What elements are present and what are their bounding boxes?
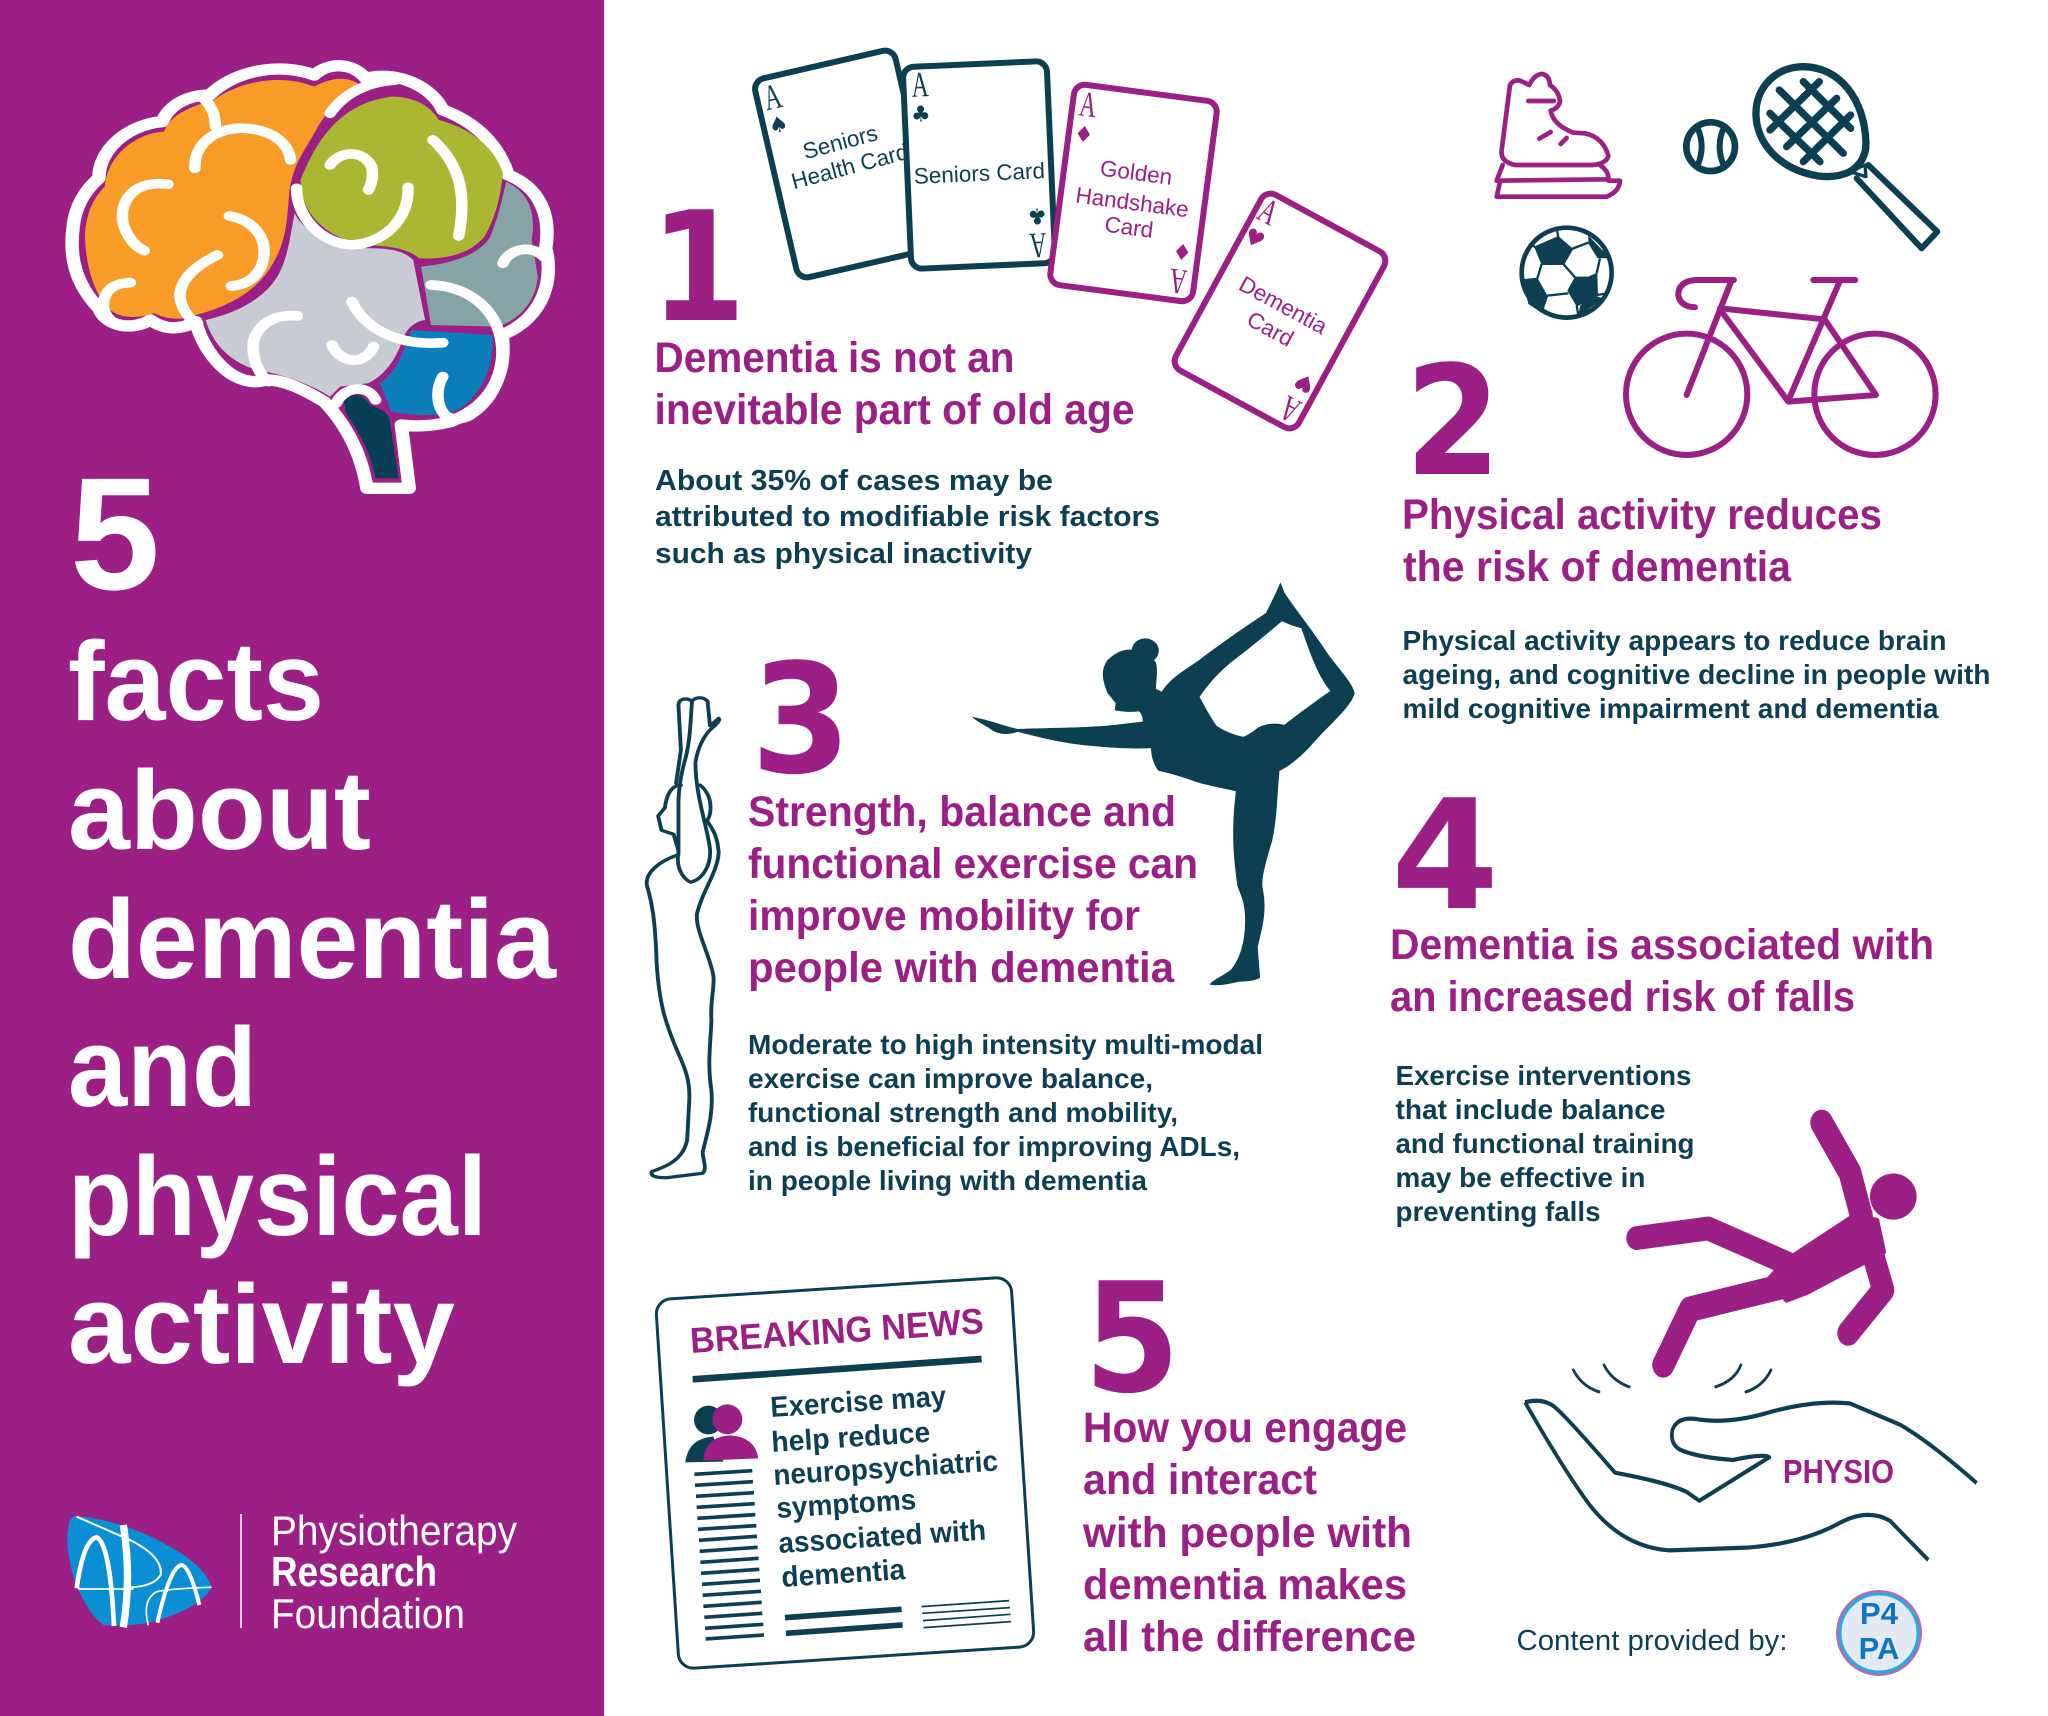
card: Seniors Health Card: Seniors bbox=[800, 120, 880, 164]
title: 5 facts about dementia and physical activity: dementia bbox=[68, 877, 557, 1002]
body text 2: mild cognitive impairment and dementia bbox=[1402, 693, 1939, 724]
body text 4: that include balance bbox=[1396, 1094, 1666, 1125]
card: Seniors Card: A bbox=[911, 64, 929, 105]
title: 5 facts about dementia and physical activity: 5 bbox=[70, 444, 160, 623]
illustration: falling figure and hand bbox=[1525, 1123, 1977, 1560]
heading 4: an increased risk of falls bbox=[1390, 973, 1855, 1021]
logo text: Physiotherapy Research Foundation: Foundation bbox=[271, 1590, 465, 1637]
body text 3: exercise can improve balance, bbox=[748, 1063, 1153, 1094]
number 1: 1 bbox=[650, 179, 746, 356]
body text 4: Exercise interventions bbox=[1396, 1060, 1692, 1091]
icon: P4PA badge: P4 bbox=[1860, 1596, 1899, 1631]
heading 4 bbox=[1390, 921, 1934, 1021]
title: 5 facts about dementia and physical activity: facts bbox=[68, 619, 324, 744]
logo divider bbox=[240, 1514, 242, 1628]
number 2: 2 bbox=[1405, 333, 1501, 510]
heading 1 bbox=[654, 334, 1134, 434]
icon: ice skate bbox=[1497, 74, 1620, 197]
number 4: 4 bbox=[1391, 767, 1499, 944]
news text bbox=[769, 1381, 999, 1594]
content credit: Content provided by: bbox=[1516, 1625, 1788, 1657]
heading 2: Physical activity reduces bbox=[1402, 491, 1882, 539]
heading 3: people with dementia bbox=[748, 944, 1175, 992]
card: Golden Handshake Card: Card bbox=[1103, 212, 1155, 243]
news text: Exercise may bbox=[769, 1381, 947, 1424]
illustration: sports icons bbox=[1497, 67, 1937, 455]
section 5: engagement bbox=[1082, 1250, 1416, 1661]
icon: bicycle bbox=[1626, 280, 1936, 455]
card: Golden Handshake Card bbox=[1049, 82, 1218, 304]
heading 2 bbox=[1402, 491, 1882, 591]
heading 1: Dementia is not an bbox=[654, 334, 1014, 382]
card: Golden Handshake Card: Golden bbox=[1099, 156, 1174, 190]
card: Seniors Health Card: A bbox=[760, 75, 785, 118]
icon: P4PA badge: PA bbox=[1859, 1631, 1899, 1666]
card: Seniors Health Card bbox=[753, 48, 939, 280]
heading 4: Dementia is associated with bbox=[1390, 921, 1934, 969]
title: 5 facts about dementia and physical activity bbox=[68, 444, 557, 1387]
card: Golden Handshake Card: ♦ bbox=[1072, 122, 1095, 149]
heading 3: functional exercise can bbox=[748, 840, 1198, 888]
body text 3: Moderate to high intensity multi-modal bbox=[748, 1029, 1263, 1060]
panel: left title panel bbox=[0, 0, 604, 1716]
section 1: dementia not inevitable bbox=[650, 179, 1160, 570]
card: Seniors Card: A bbox=[1029, 225, 1047, 266]
headline: BREAKING NEWS: BREAKING NEWS bbox=[689, 1300, 985, 1361]
icon: standing outline figure bbox=[647, 698, 719, 1178]
card: Seniors Health Card: ♠ bbox=[766, 111, 791, 140]
icon: supporting hand bbox=[1525, 1401, 1977, 1560]
card: Golden Handshake Card: Handshake bbox=[1074, 183, 1190, 222]
logo text: Physiotherapy Research Foundation bbox=[271, 1507, 517, 1637]
body text 1 bbox=[655, 465, 1160, 570]
body text 4: preventing falls bbox=[1396, 1196, 1600, 1227]
number 5: 5 bbox=[1084, 1250, 1180, 1427]
card: Golden Handshake Card: A bbox=[1077, 83, 1099, 125]
news text: symptoms bbox=[775, 1484, 917, 1525]
card: Dementia Card bbox=[1170, 188, 1390, 434]
logo text: Physiotherapy Research Foundation: Physiotherapy bbox=[271, 1507, 517, 1554]
title: 5 facts about dementia and physical activity: physical bbox=[68, 1134, 487, 1259]
card: Golden Handshake Card: A bbox=[1167, 261, 1189, 302]
title: 5 facts about dementia and physical activity: and bbox=[68, 1005, 257, 1130]
news graphics bbox=[685, 1359, 1011, 1639]
card: Dementia Card: A bbox=[1273, 388, 1307, 431]
news text: neuropsychiatric bbox=[772, 1446, 999, 1492]
title: 5 facts about dementia and physical activity: about bbox=[68, 748, 371, 873]
card: Seniors Card bbox=[903, 59, 1055, 271]
icon: coloured brain bbox=[72, 66, 548, 488]
icon: yoga silhouette bbox=[972, 582, 1355, 985]
illustration: fan of playing cards bbox=[753, 48, 1390, 434]
icon: tennis ball bbox=[1686, 122, 1735, 171]
body text 4 bbox=[1396, 1060, 1694, 1227]
news text: associated with bbox=[777, 1515, 987, 1560]
motion arcs bbox=[1573, 1365, 1771, 1392]
card: Dementia Card: Dementia bbox=[1235, 271, 1332, 339]
body text 2: ageing, and cognitive decline in people with bbox=[1402, 659, 1990, 690]
icon: APA logo bbox=[67, 1516, 212, 1627]
body text 3: and is beneficial for improving ADLs, bbox=[748, 1131, 1240, 1162]
section 2: physical activity bbox=[1402, 333, 1990, 724]
heading 5: with people with bbox=[1082, 1509, 1412, 1557]
logo text: Physiotherapy Research Foundation: Research bbox=[271, 1548, 437, 1595]
card: Dementia Card: Card bbox=[1243, 306, 1298, 352]
heading 5 bbox=[1082, 1404, 1416, 1661]
heading 5: and interact bbox=[1083, 1456, 1317, 1504]
card: Dementia Card: ♥ bbox=[1239, 224, 1269, 255]
number 3: 3 bbox=[751, 631, 851, 808]
news text: help reduce bbox=[770, 1417, 931, 1459]
icon: P4PA badge bbox=[1836, 1590, 1922, 1676]
heading 5: dementia makes bbox=[1083, 1561, 1407, 1609]
heading 3 bbox=[748, 788, 1198, 992]
body text 3 bbox=[748, 1029, 1263, 1196]
body text 1: About 35% of cases may be bbox=[655, 465, 1053, 497]
section 4: risk of falls bbox=[1390, 767, 1934, 1227]
heading 5: How you engage bbox=[1083, 1404, 1407, 1452]
body text 1: attributed to modifiable risk factors bbox=[655, 501, 1160, 533]
body text 3: in people living with dementia bbox=[748, 1165, 1147, 1196]
body text 2: Physical activity appears to reduce brain bbox=[1402, 625, 1946, 656]
icon: tennis racket bbox=[1756, 67, 1937, 248]
heading 2: the risk of dementia bbox=[1403, 543, 1792, 591]
card: Seniors Health Card: Health Card bbox=[789, 139, 911, 194]
news card: breaking news bbox=[655, 1277, 1035, 1669]
card: Seniors Card: ♣ bbox=[1027, 202, 1048, 228]
title: 5 facts about dementia and physical activity: activity bbox=[68, 1262, 455, 1387]
label: PHYSIO: PHYSIO bbox=[1783, 1453, 1894, 1490]
body text 3: functional strength and mobility, bbox=[748, 1097, 1178, 1128]
card: Dementia Card: ♥ bbox=[1290, 366, 1320, 398]
body text 1: such as physical inactivity bbox=[655, 538, 1032, 570]
body text 4: and functional training bbox=[1396, 1128, 1694, 1159]
icon: soccer ball bbox=[1522, 228, 1612, 318]
card: Golden Handshake Card: ♦ bbox=[1171, 237, 1194, 264]
icon: falling person bbox=[1637, 1123, 1917, 1365]
section 3: strength and balance bbox=[748, 631, 1263, 1196]
body text 4: may be effective in bbox=[1396, 1162, 1646, 1193]
heading 3: Strength, balance and bbox=[748, 788, 1176, 836]
card: Seniors Card: ♣ bbox=[910, 102, 931, 128]
card: Dementia Card: A bbox=[1252, 190, 1286, 233]
heading 3: improve mobility for bbox=[748, 892, 1140, 940]
body text 2 bbox=[1402, 625, 1990, 724]
news text: dementia bbox=[780, 1554, 907, 1594]
heading 5: all the difference bbox=[1083, 1613, 1416, 1661]
card: Seniors Card: Seniors Card bbox=[913, 158, 1046, 189]
heading 1: inevitable part of old age bbox=[654, 386, 1134, 434]
